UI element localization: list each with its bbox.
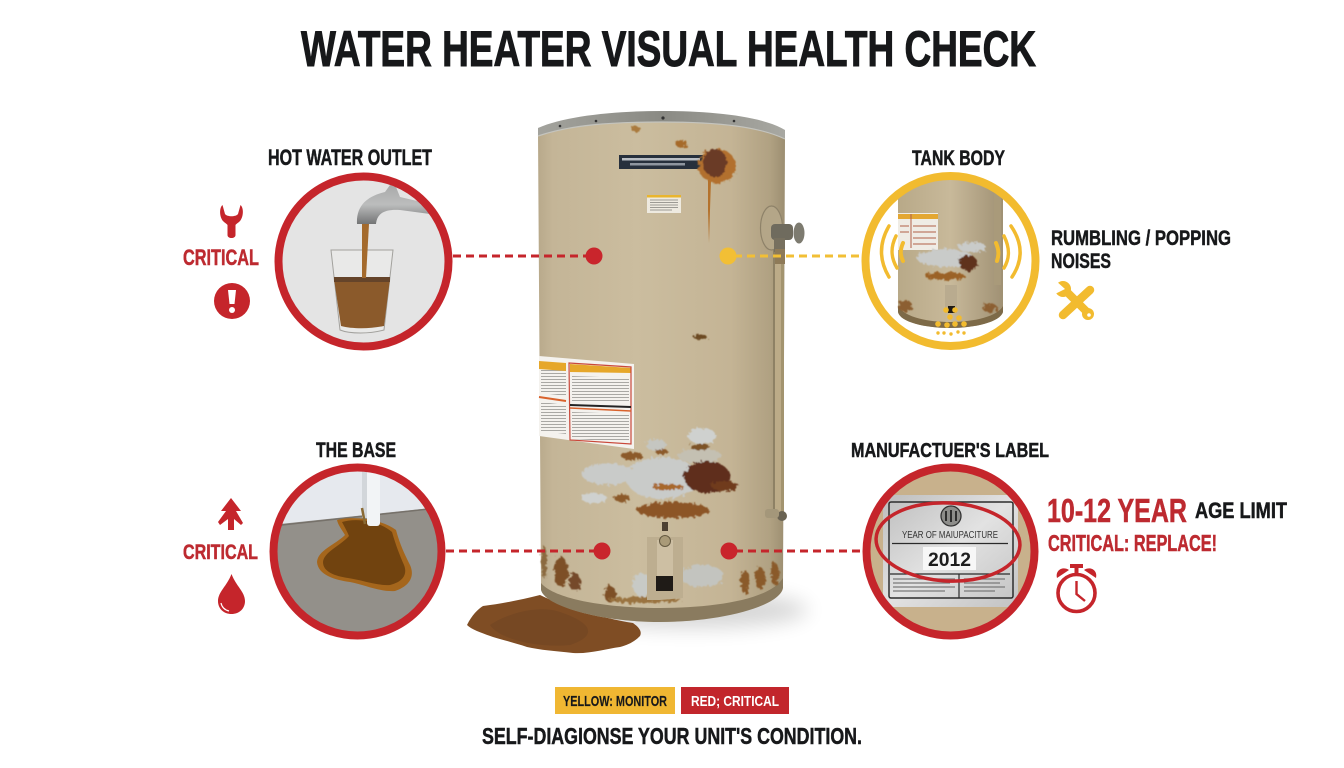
photo: tank close-up	[897, 180, 1003, 328]
highlight ellipse	[874, 499, 1022, 585]
infographic	[183, 30, 1287, 744]
heading: THE BASE	[316, 439, 396, 462]
panel: tank body: NOISES	[1051, 249, 1111, 273]
legend: red critical: RED; CRITICAL	[691, 693, 779, 710]
icon: exclamation	[214, 283, 250, 319]
relief pipe and valve	[760, 206, 804, 521]
legend: yellow monitor: YELLOW: MONITOR	[563, 693, 667, 710]
footer tagline: SELF-DIAGIONSE YOUR UNIT'S CONDITION.	[482, 723, 862, 749]
heading: MANUFACTUER'S LABEL	[851, 439, 1049, 462]
rust drip	[708, 180, 711, 243]
water heater tank	[467, 111, 808, 653]
red ring	[866, 468, 1034, 636]
red ring	[274, 468, 442, 636]
heading: TANK BODY	[912, 147, 1005, 170]
connector: tank body	[720, 248, 862, 264]
panel: hot water outlet	[183, 145, 460, 360]
photo: data plate: YEAR OF MAIUPACITURE	[902, 530, 998, 541]
icon: wrench	[220, 205, 243, 238]
connector: outlet to tank	[453, 248, 602, 264]
icon: drop	[218, 574, 245, 614]
replace warning: CRITICAL: REPLACE!	[1048, 530, 1217, 556]
age limit text: 10-12 YEAR	[1047, 492, 1187, 529]
rust puddle	[467, 595, 641, 653]
red ring	[278, 176, 448, 346]
connector: base	[446, 542, 610, 560]
rust spot upper	[631, 126, 736, 340]
icon: stopwatch	[1057, 564, 1096, 612]
critical label: CRITICAL	[183, 245, 259, 270]
icon: crossed tools	[1055, 280, 1094, 320]
heading: HOT WATER OUTLET	[268, 145, 432, 170]
small warning sticker	[647, 195, 681, 213]
legend: yellow monitor	[555, 687, 675, 714]
legend: red critical	[681, 687, 789, 714]
peeling paint and corrosion	[541, 428, 779, 603]
panel: tank body	[860, 147, 1231, 355]
large warning label	[539, 356, 634, 449]
legend	[555, 687, 789, 714]
photo: data plate	[870, 472, 1030, 632]
sound waves and sediment	[881, 226, 1020, 336]
tank body	[538, 122, 785, 622]
critical label: CRITICAL	[183, 541, 258, 564]
photo: data plate: 2012	[928, 550, 971, 571]
panel: manufacturer's label	[851, 439, 1287, 645]
yellow ring	[866, 176, 1036, 346]
age limit text: AGE LIMIT	[1195, 498, 1287, 523]
symptom text: RUMBLING / POPPING	[1051, 226, 1231, 250]
icon: arrow tree	[218, 498, 243, 530]
photo: rusty water in glass	[282, 180, 444, 342]
top rim	[538, 111, 785, 139]
serial plate	[619, 155, 703, 169]
panel: the base	[183, 439, 450, 645]
drain valve	[647, 522, 683, 600]
connector: manufacturer label	[720, 542, 862, 560]
photo: leak on floor	[278, 472, 438, 632]
bottom band	[541, 578, 783, 622]
title: WATER HEATER VISUAL HEALTH CHECK	[301, 21, 1036, 77]
